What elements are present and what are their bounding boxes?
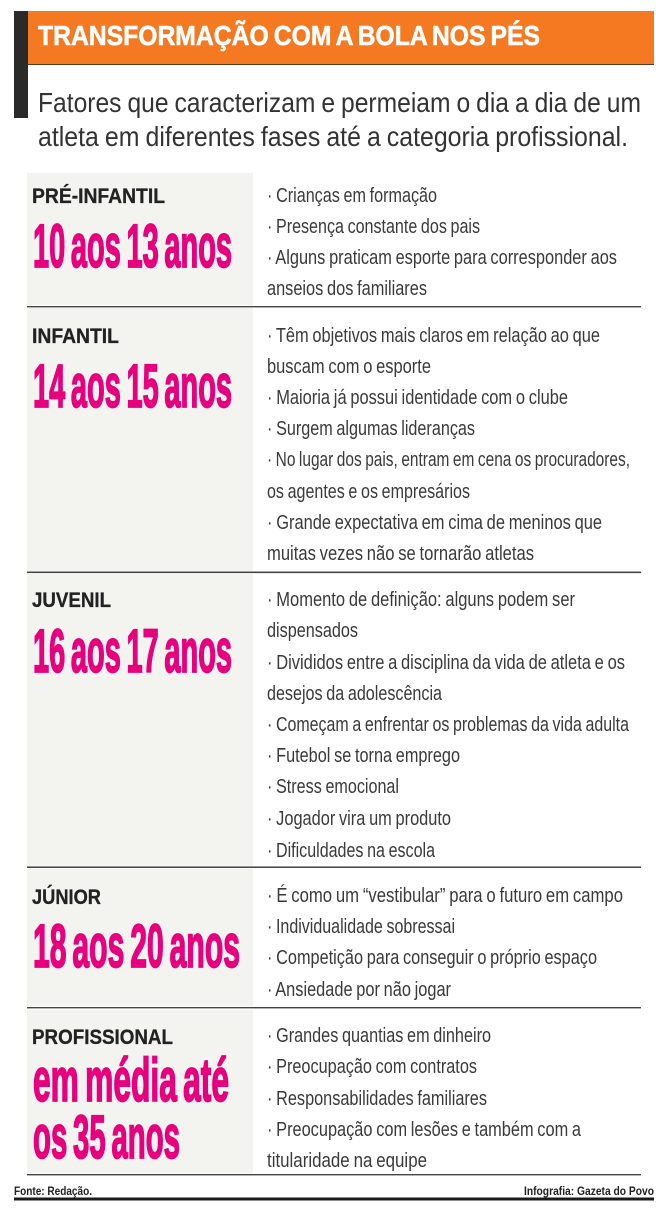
panel: profissional: · Grandes quantias em dinheiro — [267, 1025, 491, 1047]
panel: infantil: INFANTIL — [32, 325, 119, 348]
source note: Fonte: Redação. — [14, 1184, 92, 1198]
panel: juvenil — [27, 574, 641, 868]
panel: pré-infantil: · Presença constante dos pais — [267, 216, 480, 238]
panel: júnior — [27, 869, 641, 1008]
panel: infantil: os agentes e os empresários — [267, 481, 470, 503]
panel: infantil: muitas vezes não se tornarão atletas — [267, 543, 534, 565]
panel: profissional: · Responsabilidades familiares — [267, 1088, 487, 1110]
panel: profissional: · Preocupação com contratos — [267, 1056, 477, 1078]
panel: júnior: · Ansiedade por não jogar — [267, 979, 451, 1001]
panel: juvenil: · Momento de definição: alguns podem ser — [267, 589, 575, 611]
title banner: TRANSFORMAÇÃO COM A BOLA NOS PÉS — [38, 20, 540, 51]
panel: infantil: · Surgem algumas lideranças — [267, 418, 475, 440]
panel: juvenil: · Stress emocional — [267, 776, 399, 798]
panel: pré-infantil — [27, 173, 641, 307]
title banner — [28, 11, 654, 65]
panel: infantil: · Maioria já possui identidade com o clube — [267, 387, 568, 409]
panel: profissional — [27, 1010, 641, 1175]
panel: pré-infantil: · Crianças em formação — [267, 185, 437, 207]
panel: infantil — [27, 308, 641, 573]
panel: juvenil: dispensados — [267, 620, 358, 642]
panel: infantil: 14 aos 15 anos — [33, 352, 232, 420]
subtitle — [38, 87, 641, 152]
panel: infantil: buscam com o esporte — [267, 356, 431, 378]
panel: juvenil: · Dificuldades na escola — [267, 840, 436, 862]
panel: pré-infantil: anseios dos familiares — [267, 278, 427, 300]
panel: profissional: · Preocupação com lesões e também com a — [267, 1119, 582, 1141]
panel: juvenil: JUVENIL — [32, 589, 111, 612]
panel: pré-infantil: PRÉ-INFANTIL — [32, 185, 165, 208]
panel: júnior: JÚNIOR — [32, 885, 101, 909]
panel: júnior: 18 aos 20 anos — [33, 912, 240, 980]
panel: profissional: PROFISSIONAL — [32, 1026, 173, 1049]
panel: juvenil: · Jogador vira um produto — [267, 808, 451, 830]
panel: juvenil: · Futebol se torna emprego — [267, 745, 460, 767]
panel: profissional: em média até — [33, 1046, 229, 1114]
black side bar — [14, 11, 28, 118]
panel: profissional: titularidade na equipe — [267, 1150, 427, 1172]
panel: profissional: os 35 anos — [33, 1103, 180, 1171]
panel: júnior: · Individualidade sobressai — [267, 916, 455, 938]
panel: juvenil: 16 aos 17 anos — [33, 617, 232, 685]
panel: pré-infantil: 10 aos 13 anos — [33, 212, 232, 280]
panel: juvenil: desejos da adolescência — [267, 683, 443, 705]
